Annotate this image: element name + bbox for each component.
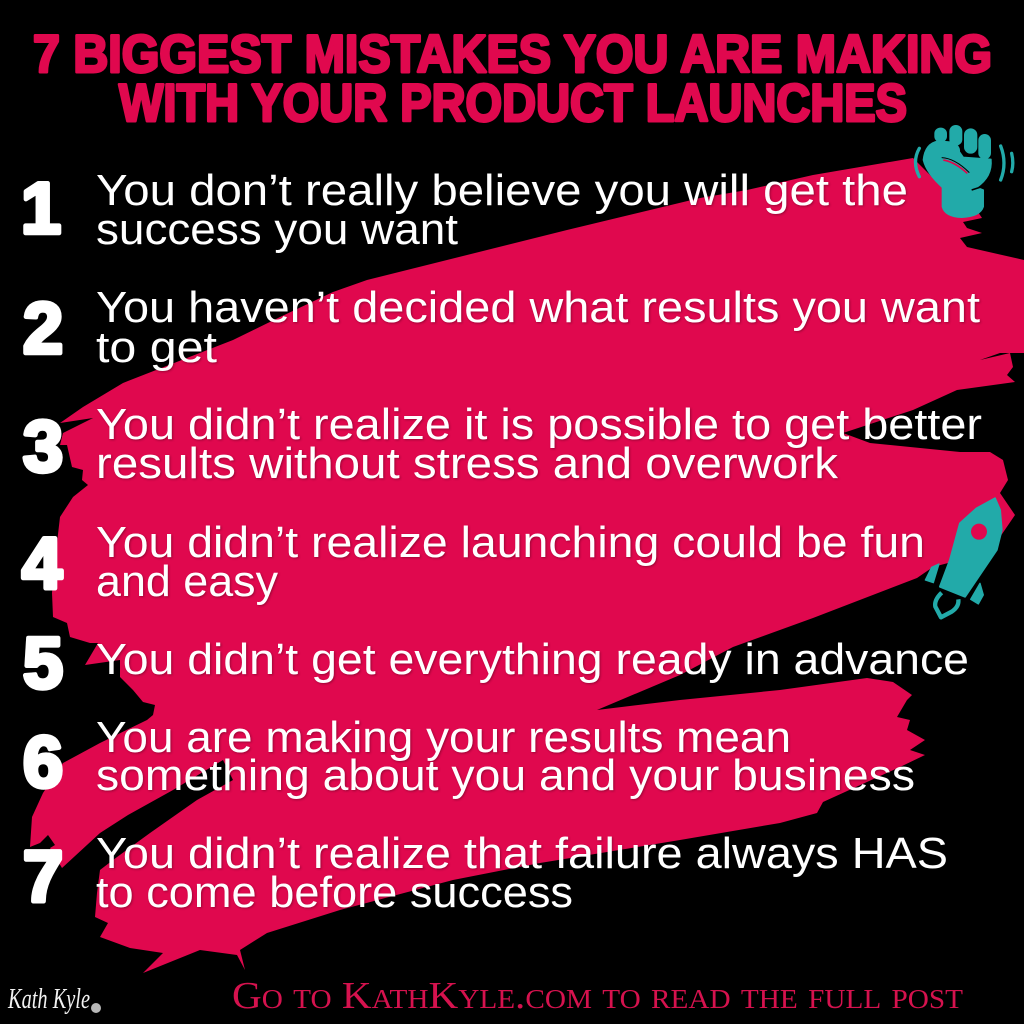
mistake 3 text: You didn’t realize it is possible to get better: [96, 400, 982, 449]
mistake 7 text: to come before success: [96, 868, 573, 917]
mistake 2 text: You haven’t decided what results you want: [96, 283, 980, 332]
mistake 4 text: You didn’t realize launching could be fun: [96, 518, 925, 567]
mistake 6 text: something about you and your business: [96, 751, 915, 800]
title: [33, 25, 992, 133]
number 3: 3: [23, 407, 63, 487]
mistake 2 text: to get: [96, 323, 217, 372]
number 2: 2: [23, 289, 63, 369]
icon: rocket: [925, 498, 1002, 617]
number 6: 6: [23, 723, 63, 803]
mistake 1 text: You don’t really believe you will get the: [96, 166, 908, 215]
mistake 2 text: [96, 283, 980, 372]
mistake 1 text: success you want: [96, 205, 458, 254]
icon: raised fist: [915, 126, 1013, 217]
mistake 4 text: [96, 518, 925, 606]
red brush stroke background: [30, 158, 1024, 973]
mistake 1 text: [96, 166, 908, 254]
mistake 5 text: You didn’t get everything ready in advance: [96, 635, 969, 684]
mistake 4 text: and easy: [96, 557, 278, 606]
number 7: 7: [23, 837, 63, 917]
mistake 6 text: You are making your results mean: [96, 713, 791, 762]
logo: Kath Kyle signature: Kath Kyle: [7, 984, 90, 1015]
mistake 6 text: [96, 713, 915, 800]
mistake 7 text: [96, 829, 948, 917]
mistake 3 text: results without stress and overwork: [96, 439, 839, 488]
number 1: 1: [21, 169, 61, 249]
mistake 3 text: [96, 400, 982, 488]
number 5: 5: [23, 624, 63, 704]
mistake 7 text: You didn’t realize that failure always HAS: [96, 829, 948, 878]
title: WITH YOUR PRODUCT LAUNCHES: [119, 74, 907, 133]
number 4: 4: [22, 524, 62, 604]
footer call to action: Go to KathKyle.com to read the full post: [232, 975, 964, 1017]
